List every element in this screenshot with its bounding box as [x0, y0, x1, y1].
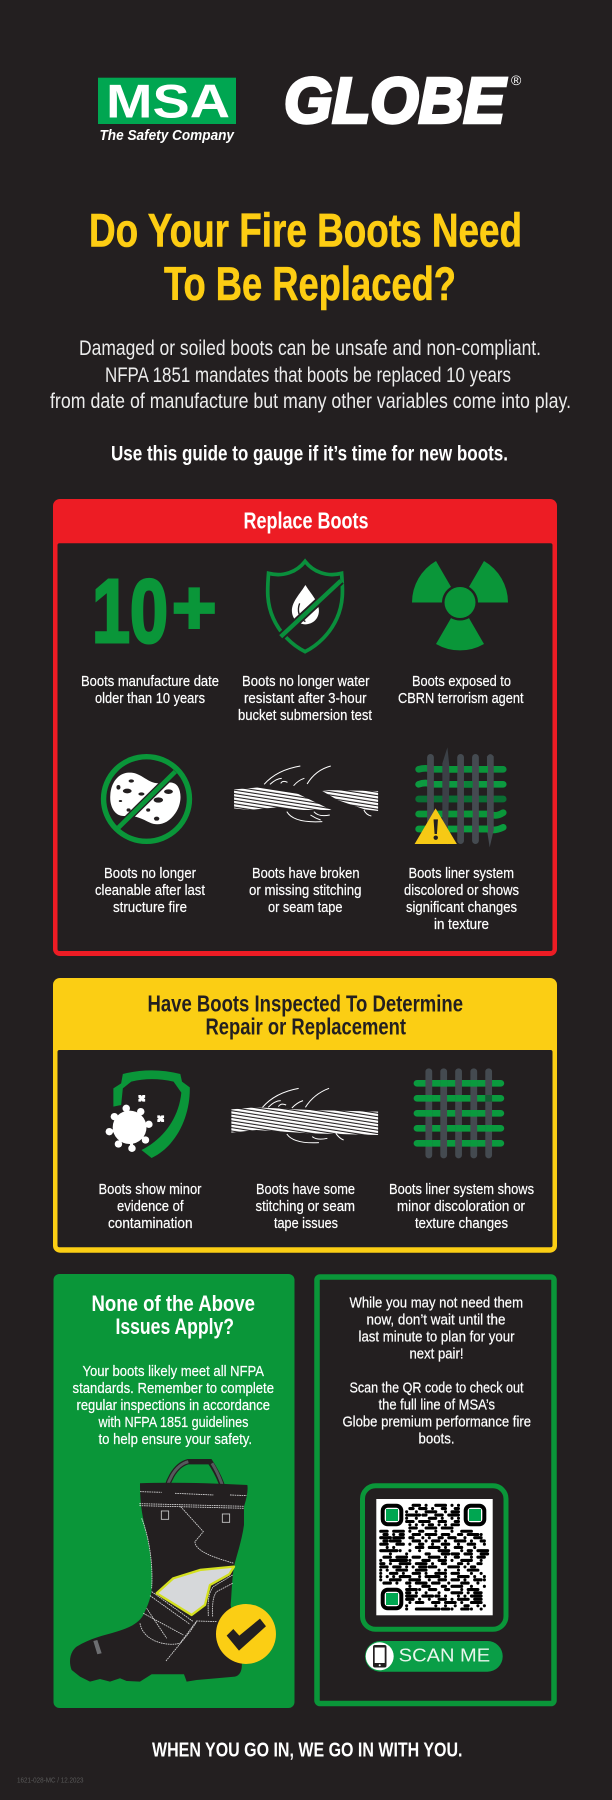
caption: broken stitching: [249, 865, 362, 916]
caption: liner discolored: in texture: [434, 916, 489, 933]
caption: contamination: Boots show minor: [98, 1181, 202, 1198]
intro paragraph: [50, 337, 571, 413]
caption: water resistance: bucket submersion test: [238, 707, 373, 724]
qr code: [362, 1486, 506, 1629]
caption: liner discolored: Boots liner system: [408, 865, 514, 882]
icon: contaminated shield: [106, 1070, 190, 1158]
tagline: WHEN YOU GO IN, WE GO IN WITH YOU.: [152, 1740, 462, 1762]
panel: have boots inspected: [53, 978, 557, 1253]
caption: contamination: contamination: [108, 1215, 192, 1232]
heading: inspect: [148, 990, 463, 1039]
document code: 1621-028-MC / 12.2023: [17, 1776, 84, 1785]
caption: liner discolored: discolored or shows: [404, 882, 519, 899]
icon: liner mesh: [417, 1072, 501, 1155]
icon: worn stitching rope: [231, 1088, 378, 1143]
caption: age: Boots manufacture date: [81, 673, 219, 690]
button: scan me: SCAN ME: [399, 1646, 490, 1666]
text: plan next pair: Globe premium performance fire: [342, 1414, 531, 1430]
logo: GLOBE: GLOBE: [284, 64, 507, 136]
caption: CBRN: CBRN terrorism agent: [398, 690, 524, 707]
icon: radiation: [412, 561, 508, 650]
caption: broken stitching: or seam tape: [268, 899, 342, 916]
caption: not cleanable: structure fire: [113, 899, 187, 916]
heading: none of the above: Issues Apply?: [116, 1314, 234, 1339]
text: plan next pair: next pair!: [410, 1346, 464, 1362]
logo: MSA The Safety Company: [98, 74, 236, 144]
panel: replace boots: [53, 499, 557, 956]
icon: sponge prohibited: [104, 757, 189, 841]
caption: broken stitching: Boots have broken: [252, 865, 360, 882]
caption: broken stitching: or missing stitching: [249, 882, 362, 899]
icon: fire boot with check: [70, 1462, 276, 1682]
title: [89, 204, 522, 310]
heading: inspect: Repair or Replacement: [206, 1013, 406, 1039]
icon: 10+: +: [172, 565, 216, 650]
icon: yellow check: [216, 1604, 276, 1664]
icon: phone: [373, 1645, 386, 1668]
caption: liner minor: Boots liner system shows: [389, 1181, 534, 1198]
caption: not cleanable: cleanable after last: [95, 882, 206, 899]
caption: liner minor: minor discoloration or: [397, 1198, 525, 1215]
caption: liner minor: [389, 1181, 534, 1232]
caption: stitching issues: tape issues: [274, 1215, 338, 1232]
caption: water resistance: resistant after 3-hour: [244, 690, 366, 707]
caption: not cleanable: Boots no longer: [104, 865, 196, 882]
text: plan next pair: the full line of MSA’s: [378, 1396, 495, 1414]
icon: shield with water drop: [268, 561, 342, 652]
text: standards: [72, 1363, 274, 1448]
panel: none of the above: [54, 1274, 294, 1708]
caption: stitching issues: Boots have some: [256, 1181, 355, 1198]
heading: none of the above: [92, 1291, 255, 1339]
caption: water resistance: [238, 673, 373, 724]
text: plan next pair: last minute to plan for your: [358, 1328, 514, 1346]
text: standards: Your boots likely meet all NFPA: [82, 1363, 264, 1380]
caption: not cleanable: [95, 865, 206, 916]
caption: water resistance: Boots no longer water: [242, 673, 370, 690]
intro paragraph: NFPA 1851 mandates that boots be replaced 10 years: [105, 364, 511, 387]
caption: age: older than 10 years: [95, 690, 205, 707]
text: standards: regular inspections in accordance: [76, 1397, 270, 1414]
heading: none of the above: None of the Above: [92, 1291, 255, 1316]
caption: contamination: evidence of: [117, 1198, 184, 1215]
logo: MSA The Safety Company: MSA: [106, 74, 230, 127]
text: plan next pair: boots.: [418, 1430, 454, 1448]
text: plan next pair: While you may not need them: [350, 1294, 523, 1312]
caption: CBRN: Boots exposed to: [412, 673, 511, 690]
caption: age: [81, 673, 219, 707]
text: standards: with NFPA 1851 guidelines: [98, 1414, 249, 1431]
logo: MSA The Safety Company: The Safety Company: [100, 128, 235, 144]
text: plan next pair: [342, 1294, 531, 1448]
icon: damaged liner with warning: [415, 747, 503, 847]
caption: contamination: [98, 1181, 202, 1232]
caption: stitching issues: stitching or seam: [256, 1198, 355, 1215]
icon: warning triangle: [415, 808, 457, 844]
text: plan next pair: Scan the QR code to check out: [350, 1380, 524, 1396]
heading: replace boots: Replace Boots: [244, 508, 368, 534]
caption: CBRN: [398, 673, 524, 707]
caption: liner discolored: significant changes: [406, 899, 517, 916]
icon: broken stitching rope: [234, 766, 378, 822]
guide call to action: Use this guide to gauge if it’s time for new boots.: [111, 443, 508, 466]
text: standards: to help ensure your safety.: [98, 1431, 252, 1448]
caption: liner minor: texture changes: [415, 1215, 508, 1232]
heading: inspect: Have Boots Inspected To Determine: [148, 990, 463, 1016]
caption: stitching issues: [256, 1181, 355, 1232]
panel: scan qr code: [317, 1277, 554, 1704]
caption: liner discolored: [404, 865, 519, 933]
icon: 10+: 10: [92, 562, 168, 662]
title: To Be Replaced?: [164, 257, 456, 310]
text: plan next pair: now, don’t wait until the: [366, 1312, 506, 1328]
button: scan me: [365, 1641, 503, 1672]
text: standards: standards. Remember to complete: [72, 1380, 274, 1397]
logo: GLOBE: ®: [511, 72, 522, 88]
